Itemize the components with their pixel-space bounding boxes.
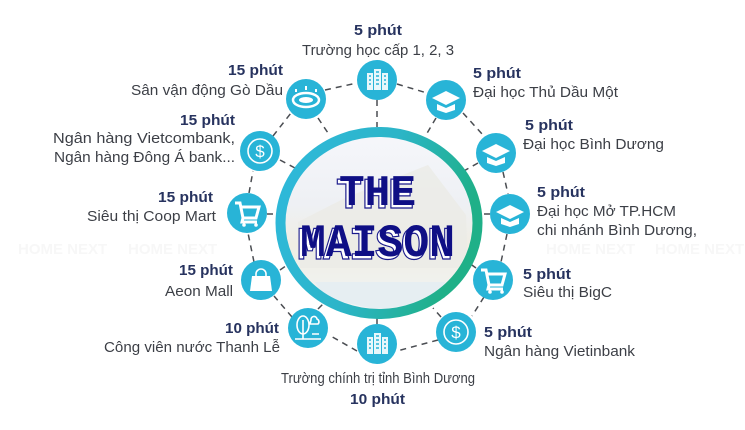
- label: Ngân hàng Vietinbank: 5 phút: [484, 324, 532, 341]
- label: Đại học Bình Dương: 5 phút: [525, 117, 573, 134]
- title: THE MAISON: MAISON: [297, 221, 453, 273]
- label: Công viên nước Thanh Lễ: [104, 320, 280, 356]
- icon: park: [288, 308, 328, 348]
- icon: graduation cap 2: [476, 133, 516, 173]
- label: Sân vận động Gò Dầu: Sân vận động Gò Dầu: [131, 82, 283, 99]
- watermark: [18, 241, 744, 258]
- icon: dollar left: $: [255, 142, 265, 161]
- label: Đại học Mở TP.HCM: 5 phút: [537, 184, 585, 201]
- label: Trường chính trị tỉnh Bình Dương: Trường chính trị tỉnh Bình Dương: [281, 370, 475, 387]
- icon: dollar right: $: [451, 323, 461, 342]
- dashed orbit connectors: [248, 83, 508, 351]
- icon: school bottom: [357, 324, 397, 364]
- title: THE MAISON: THE: [336, 172, 414, 222]
- label: Đại học Thủ Dầu Một: 5 phút: [473, 65, 521, 82]
- label: Ngân hàng Vietcombank: [53, 112, 235, 166]
- label: Siêu thị Coop Mart: [87, 189, 217, 225]
- label: Đại học Mở TP.HCM: chi nhánh Bình Dương,: [537, 222, 697, 239]
- title: THE MAISON: THE: [339, 169, 416, 219]
- label: Aeon Mall: 15 phút: [179, 262, 233, 279]
- label: Đại học Bình Dương: Đại học Bình Dương: [523, 136, 664, 153]
- title: THE MAISON: MAISON: [300, 218, 455, 270]
- label: Sân vận động Gò Dầu: 15 phút: [228, 62, 283, 79]
- label: Trường học cấp 1, 2, 3: [302, 22, 454, 59]
- icon: dollar left: [240, 131, 280, 171]
- label: Đại học Thủ Dầu Một: [473, 65, 619, 101]
- watermark: HOME NEXT: [655, 241, 744, 258]
- label: Siêu thị BigC: [523, 266, 612, 301]
- label: Đại học Mở TP.HCM: Đại học Mở TP.HCM: [537, 203, 676, 220]
- icon: school top: [357, 60, 397, 100]
- label: Ngân hàng Vietcombank: Ngân hàng Đông Á bank...: [54, 149, 235, 166]
- label: Đại học Mở TP.HCM: [537, 184, 697, 239]
- icon: stadium: [286, 79, 326, 119]
- ring: [280, 132, 478, 314]
- label: Aeon Mall: Aeon Mall: [165, 283, 233, 300]
- label: Trường chính trị tỉnh Bình Dương: [281, 370, 475, 408]
- label: Trường học cấp 1, 2, 3: 5 phút: [354, 22, 402, 39]
- label: Công viên nước Thanh Lễ: Công viên nước Thanh Lễ: [104, 339, 280, 356]
- label: Ngân hàng Vietcombank: 15 phút: [180, 112, 235, 129]
- central circle: [280, 132, 478, 314]
- icon: graduation cap 3: [490, 194, 530, 234]
- watermark: HOME NEXT: [128, 241, 217, 258]
- label: Sân vận động Gò Dầu: [131, 62, 283, 99]
- label: Ngân hàng Vietinbank: [484, 324, 636, 360]
- icon: dollar right: [436, 312, 476, 352]
- label: Trường học cấp 1, 2, 3: Trường học cấp 1, 2, 3: [302, 42, 454, 59]
- label: Ngân hàng Vietinbank: Ngân hàng Vietinbank: [484, 343, 636, 360]
- label: Siêu thị BigC: Siêu thị BigC: [523, 284, 612, 301]
- label: Công viên nước Thanh Lễ: 10 phút: [225, 320, 279, 337]
- icon: cart left: [227, 193, 267, 233]
- label: Ngân hàng Vietcombank: Ngân hàng Vietcombank,: [53, 130, 235, 147]
- icon: shopping bag: [241, 260, 281, 300]
- label: Đại học Bình Dương: [523, 117, 664, 153]
- title: THE MAISON: [297, 169, 455, 273]
- label: Aeon Mall: [165, 262, 233, 300]
- label: Đại học Thủ Dầu Một: Đại học Thủ Dầu Một: [473, 84, 619, 101]
- watermark: HOME NEXT: [546, 241, 635, 258]
- building photo background: [281, 132, 477, 314]
- icon: cart right: [473, 260, 513, 300]
- label: Siêu thị Coop Mart: Siêu thị Coop Mart: [87, 208, 217, 225]
- label: Siêu thị BigC: 5 phút: [523, 266, 571, 283]
- icon: graduation cap 1: [426, 80, 466, 120]
- label: Siêu thị Coop Mart: 15 phút: [158, 189, 213, 206]
- label: Trường chính trị tỉnh Bình Dương: 10 phút: [350, 391, 405, 408]
- watermark: HOME NEXT: [18, 241, 107, 258]
